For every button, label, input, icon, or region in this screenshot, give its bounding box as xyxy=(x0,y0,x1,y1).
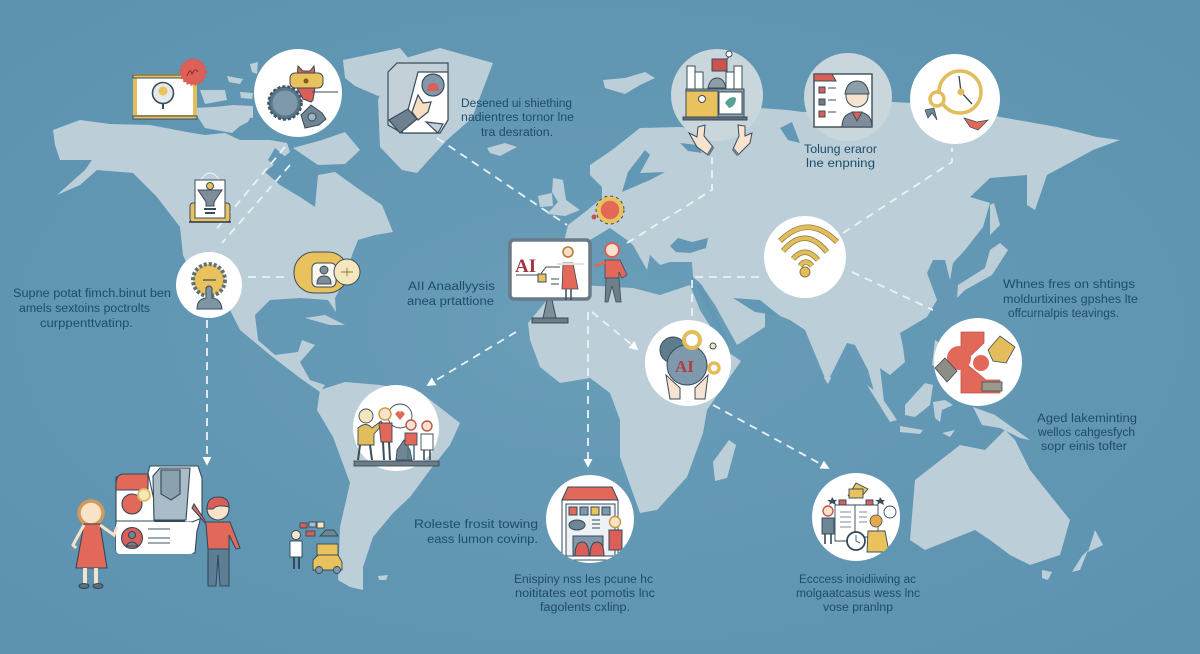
icon: family with heart circle xyxy=(353,385,439,471)
Africa xyxy=(528,285,741,513)
text: store caption: noititates eot pomotis lnc xyxy=(515,588,655,600)
Japan and Sakhalin xyxy=(957,203,1008,298)
text: checklist caption: lne enpning xyxy=(806,158,875,170)
text: left block: curppenttvatinp. xyxy=(40,318,133,330)
Black Sea xyxy=(670,238,708,253)
text: AI analysis label: AII Anaallyysis xyxy=(408,281,495,293)
icon: storefront circle xyxy=(546,475,634,563)
Gulf of Ob xyxy=(780,122,800,143)
text: left block: amels sextoins poctrolts xyxy=(19,303,150,315)
text: AI analysis label: anea prtattione xyxy=(407,296,494,308)
Bering inlet xyxy=(268,148,295,178)
Svalbard xyxy=(603,72,655,94)
text: South America caption: eass lumon covinp. xyxy=(427,534,538,546)
South America xyxy=(317,382,460,590)
icon: certificate with seal xyxy=(133,60,206,119)
icon: checklist with headset person circle xyxy=(804,53,892,141)
icon: lightbulb funnel document xyxy=(189,173,231,222)
text: left block: Supne potat fimch.binut ben xyxy=(13,288,171,300)
icon: document with pointing hand xyxy=(388,63,448,133)
text: right lower block: wellos cahgesfych xyxy=(1037,427,1135,439)
icon: gears circle xyxy=(254,49,342,137)
Eurasia xyxy=(530,102,1120,410)
icon: red document emblem circle xyxy=(934,318,1022,406)
text: book caption: vose pranlnp xyxy=(823,602,893,614)
text: right lower block: Aged lakeminting xyxy=(1037,413,1137,425)
Iceland and Britain xyxy=(487,143,580,216)
text: right upper block: Whnes fres on shtings xyxy=(1003,279,1135,291)
White Sea xyxy=(680,143,702,153)
icon: AI head with gears circle: AI xyxy=(675,357,694,376)
Cuba xyxy=(305,315,345,325)
icon: wifi circle xyxy=(764,216,846,298)
inland seas xyxy=(268,122,800,347)
icon: yellow profile pill xyxy=(294,252,360,293)
Greenland xyxy=(378,48,493,173)
text: South America caption: Roleste frosit towing xyxy=(414,519,538,531)
text: right lower block: sopr einis tofter xyxy=(1041,441,1127,453)
North America xyxy=(53,120,393,392)
Falklands and Sri Lanka xyxy=(378,372,831,580)
icon: clock with gears circle xyxy=(910,54,1000,144)
Baltic Sea xyxy=(622,150,665,192)
Red Sea xyxy=(696,285,730,347)
Australia xyxy=(910,430,1070,565)
text: store caption: Enispiny nss les pcune hc xyxy=(514,574,653,586)
icon: two people with documents xyxy=(73,466,240,588)
icon: red and yellow sun gear xyxy=(592,196,624,224)
text: upper centre block: tra desration. xyxy=(481,127,553,139)
text: right upper block: offcurnalpis teavings. xyxy=(1008,308,1119,320)
text: book caption: Ecccess inoidiiwing ac xyxy=(799,574,916,586)
world map xyxy=(53,48,1120,590)
text: upper centre block: Desened ui shiething xyxy=(461,98,572,110)
Madagascar xyxy=(713,440,736,481)
Southeast Asia islands xyxy=(867,340,1030,440)
Persian Gulf xyxy=(733,298,780,316)
icon: person with cart and parcels xyxy=(290,522,342,574)
New Zealand and Tasmania xyxy=(1042,530,1103,580)
text: upper centre block: nadientres tornor lne xyxy=(461,112,574,124)
dashed connector lines xyxy=(207,138,952,468)
Arctic islands xyxy=(192,48,410,165)
icon: AI head with gears circle xyxy=(645,320,731,406)
text: book caption: molgaatcasus wess lnc xyxy=(796,588,920,600)
text: checklist caption: Tolung eraror xyxy=(804,144,877,156)
text: store caption: fagolents cxlinp. xyxy=(540,602,630,614)
icon: AI monitor presentation: AI xyxy=(515,256,536,277)
icon: buildings desk circle xyxy=(671,49,763,155)
icon: AI monitor presentation xyxy=(510,240,627,323)
text: right upper block: moldurtixines gpshes lte xyxy=(1003,294,1138,306)
icon: book with people circle xyxy=(812,473,900,561)
icon: person with gear circle xyxy=(176,252,242,318)
